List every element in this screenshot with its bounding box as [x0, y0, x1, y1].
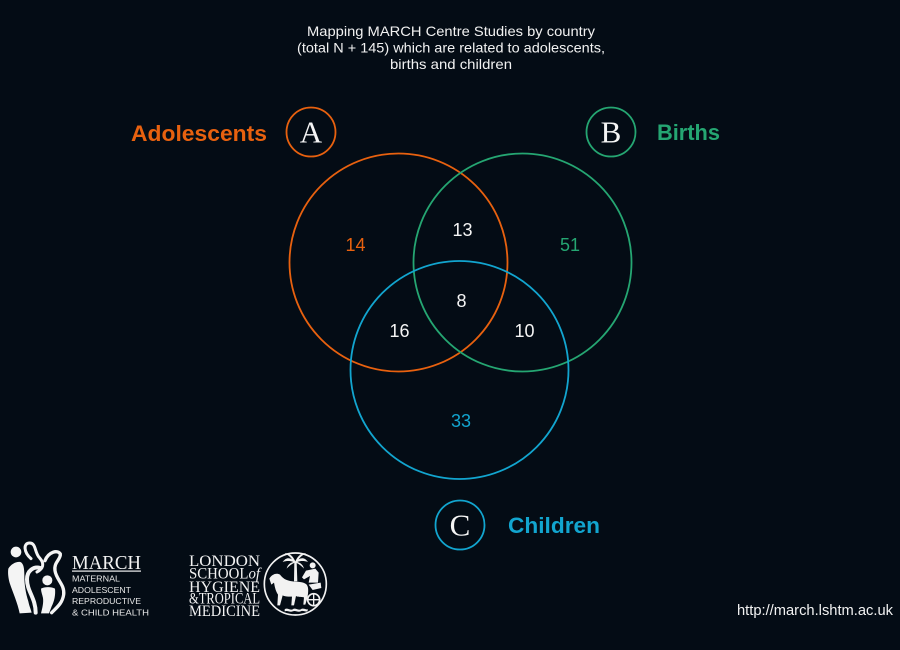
wordmark: LONDON — [189, 553, 260, 570]
url: http://march.lshtm.ac.uk — [737, 603, 894, 619]
circle: Adolescents — [290, 154, 508, 372]
circle: Births — [414, 154, 632, 372]
label: Births: Births — [657, 120, 720, 145]
wordmark: SCHOOLof — [189, 566, 263, 582]
logo: MARCH: REPRODUCTIVE — [72, 596, 141, 606]
label: Births — [586, 108, 720, 156]
icon: crest seal — [264, 553, 326, 615]
wordmark: &TROPICAL — [189, 590, 260, 608]
title — [297, 23, 605, 72]
value: adolescents and children: 16 — [389, 321, 410, 341]
title: Mapping MARCH Centre Studies by country — [307, 23, 595, 39]
label: Children — [436, 500, 600, 550]
venn diagram — [290, 154, 632, 479]
logo: MARCH: & CHILD HEALTH — [72, 608, 149, 618]
label: Births: B — [601, 114, 621, 150]
label: Children: Children — [508, 513, 600, 538]
value: births and children: 10 — [514, 321, 535, 341]
wordmark: MEDICINE — [189, 603, 260, 620]
wordmark: HYGIENE — [189, 579, 260, 596]
icon: family figures — [8, 543, 64, 613]
logo: MARCH: ADOLESCENT — [72, 585, 131, 595]
label: Adolescents: Adolescents — [131, 121, 267, 146]
logo: LSHTM — [189, 553, 326, 620]
value: adolescents and births: 13 — [452, 220, 473, 240]
value: all three: 8 — [456, 291, 467, 311]
label: Adolescents — [131, 108, 336, 156]
label: Adolescents: A — [300, 114, 323, 150]
value: births only: 51 — [560, 235, 580, 255]
title: (total N + 145) which are related to adolescents, — [297, 40, 605, 56]
logo: MARCH: MATERNAL — [72, 574, 120, 584]
wordmark — [189, 553, 263, 620]
logo: MARCH — [8, 543, 149, 618]
value: adolescents only: 14 — [345, 235, 366, 255]
label: Children: C — [450, 508, 470, 542]
wordmark: MARCH — [72, 552, 141, 574]
circle: Children — [350, 261, 568, 479]
value: children only: 33 — [451, 411, 471, 431]
title: births and children — [390, 56, 512, 72]
